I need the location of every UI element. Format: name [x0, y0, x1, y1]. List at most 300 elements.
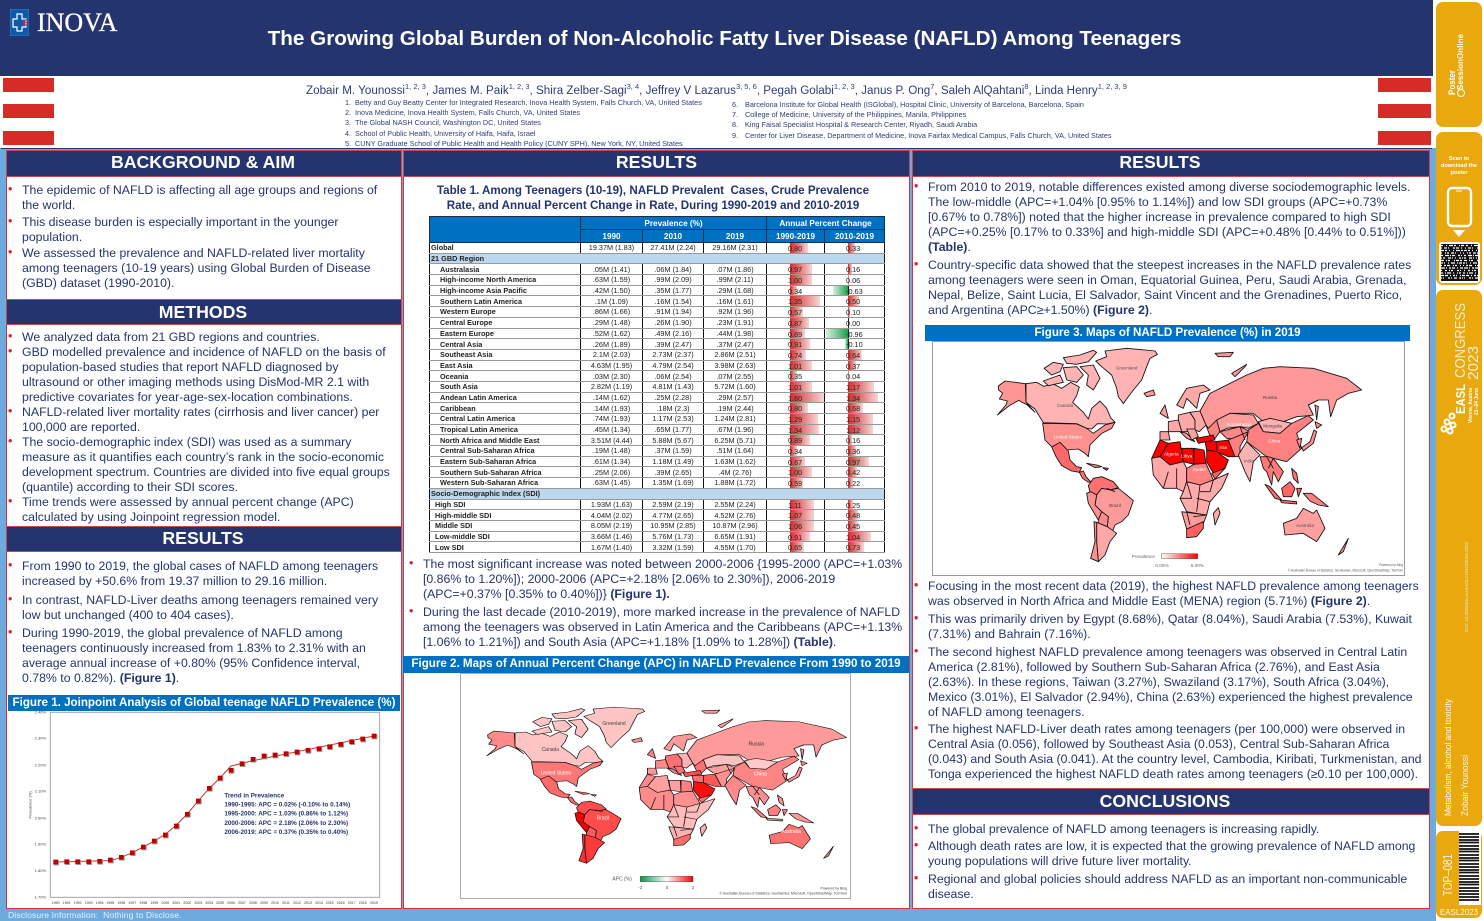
- table 1: .63M (1.45): [593, 478, 630, 487]
- bullet 3: average annual increase of +0.80% (95% Confidence interval,: [22, 656, 360, 670]
- bullet 4: measure as it quantifies each country’s rank in the socio-economic: [22, 450, 384, 464]
- bullet 1: The most significant increase was noted between 2000-2006 {1995-2000 (APC=+1.03%: [423, 557, 902, 571]
- chart: joinpoint line chart: 1.70%: [35, 894, 46, 899]
- chart: joinpoint line chart: 1.90%: [35, 842, 46, 847]
- bullet 2: Country-specific data showed that the steepest increases in the NAFLD prevalence rates: [928, 258, 1411, 272]
- table 1: 1.15: [846, 415, 860, 424]
- legend: prevalence scale: 5.00%: [1191, 563, 1204, 568]
- map: figure 2 APC world map: Canada: [542, 747, 559, 753]
- table 1: 3.32M (1.59): [652, 543, 694, 552]
- map credit: © Australian Bureau of Statistics, GeoNames, Microsoft, OpenStreetMap, TomTom: [1288, 568, 1403, 572]
- affiliations right: 7.: [732, 110, 738, 119]
- panel: EASL congress and session details: [1436, 290, 1482, 826]
- bullet 2: Although death rates are low, it is expected that the growing prevalence of NAFLD among: [928, 839, 1415, 853]
- bullet 5: Time trends were assessed by annual percent change (APC): [22, 495, 354, 509]
- bullet 2: [22, 345, 386, 405]
- map: figure 3 prevalence world map: Australia: [1296, 523, 1314, 528]
- table 1: 5.72M (1.60): [714, 382, 756, 391]
- callout: trend in prevalence: Trend in Prevalence: [224, 792, 285, 799]
- map: figure 2 APC world map: Greenland: [602, 721, 626, 727]
- table 1: 0.74: [788, 351, 802, 360]
- table 1: 8.05M (2.19): [591, 521, 632, 530]
- table 1: .25M (2.06): [593, 468, 630, 477]
- table 1: .06M (2.54): [654, 372, 692, 381]
- chart: joinpoint line chart: 2002: [183, 901, 191, 905]
- bullet 2: predictive covariates for year-age-sex-location combinations.: [22, 390, 353, 404]
- table 1: .51M (1.64): [716, 446, 754, 455]
- table 1: 1.17M (2.53): [652, 414, 694, 423]
- affiliations left: The Global NASH Council, Washington DC, United States: [355, 118, 541, 127]
- table 1: Central Europe: [440, 318, 492, 327]
- bullet 2: During the last decade (2010-2019), more marked increase in the prevalence of NAFLD: [423, 605, 900, 619]
- bullet 1: (APC=+0.37% [0.35% to 0.40%])} (Figure 1).: [423, 587, 670, 601]
- table 1: 1990: [602, 232, 621, 240]
- bullet 3: [22, 405, 379, 435]
- table 1: 0.64: [846, 351, 860, 360]
- bullet 4: Central Asia (0.056), followed by Southeast Asia (0.053), Central Sub-Saharan Africa: [928, 737, 1389, 751]
- bullet 1: Focusing in the most recent data (2019), the highest NAFLD prevalence among teenagers: [928, 579, 1419, 593]
- table 1: .67M (1.96): [716, 425, 754, 434]
- map credit: Powered by Bing: [821, 886, 847, 890]
- table 1: 1.35: [788, 297, 802, 306]
- affiliations right: 9.: [732, 131, 738, 140]
- bullet 2: [423, 605, 902, 650]
- table 1: 0.80: [788, 244, 802, 253]
- table 1: Western Europe: [440, 307, 496, 316]
- legend: APC scale: -2: [638, 885, 643, 890]
- panel: EASL congress and session details: CONGRESS: [1453, 303, 1469, 378]
- bullet 1: [423, 557, 902, 602]
- table 1: .4M (2.76): [718, 468, 752, 477]
- map: figure 3 prevalence world map: United States: [1054, 435, 1083, 440]
- table 1: 0.89: [788, 436, 802, 445]
- table 1: 1.67M (1.40): [591, 543, 632, 552]
- map: figure 3 prevalence world map: Russia: [1263, 395, 1278, 400]
- bullet 3: Regional and global policies should address NAFLD as an important non-communicable: [928, 872, 1407, 886]
- bullet 3: (2.63%). In these regions, Taiwan (3.27%), Swaziland (3.17%), South Africa (3.04%),: [928, 675, 1389, 689]
- title: The Growing Global Burden of Non-Alcoholic Fatty Liver Disease (NAFLD) Among Teenagers: [268, 27, 1181, 50]
- table 1: 2.1M (2.03): [593, 350, 630, 359]
- panel: poster id and barcode: [1436, 831, 1482, 918]
- table 1: 1.34: [788, 426, 802, 435]
- logo: Inova: [10, 8, 118, 37]
- table 1: 4.79M (2.54): [652, 361, 694, 370]
- table 1: .37M (1.59): [654, 446, 692, 455]
- table 1: 1.01: [788, 362, 802, 371]
- table 1: .19M (2.44): [716, 404, 754, 413]
- table 1: 0.45: [846, 522, 860, 531]
- table 1: 0.68: [846, 404, 860, 413]
- table 1: 0.80: [788, 404, 802, 413]
- table 1: .92M (1.96): [716, 307, 754, 316]
- table 1: Central Latin America: [440, 414, 515, 423]
- affiliations left: 1.: [345, 98, 351, 107]
- chart: joinpoint line chart: 2007: [238, 901, 246, 905]
- table 1: 1.63M (1.62): [714, 457, 756, 466]
- table 1: .06M (1.84): [654, 265, 692, 274]
- panel: EASL congress and session details: DOI: 10.3252/pso.eu.EASLCONGRESS.2023: [1464, 542, 1470, 632]
- bullet 1: (APC=+0.25% [0.17% to 0.33%] and high-middle SDI (APC=+0.48% [0.44% to 0.51%])): [928, 225, 1406, 239]
- table 1: High-income Asia Pacific: [440, 286, 527, 295]
- table 1: Middle SDI: [435, 521, 472, 530]
- table 1: .14M (1.93): [593, 404, 630, 413]
- table 1: Tropical Latin America: [440, 425, 518, 434]
- map: figure 3 prevalence world map: Libya: [1181, 454, 1193, 459]
- logo wordmark: INOVA: [37, 8, 117, 37]
- table 1: .16M (1.61): [716, 297, 754, 306]
- disclosure: Disclosure Information: Nothing to Disclose.: [8, 910, 182, 920]
- heading: background and aim: BACKGROUND & AIM: [111, 152, 295, 172]
- table 1: Andean Latin America: [440, 393, 517, 402]
- heading: results column 2: [403, 150, 910, 177]
- table 1: 3.66M (1.46): [591, 532, 632, 541]
- chart: joinpoint line chart: 2001: [172, 901, 180, 905]
- bullet 4: [928, 722, 1422, 782]
- table 1: .29M (1.68): [716, 286, 754, 295]
- table 1: 5.76M (1.73): [652, 532, 694, 541]
- affiliations right: 6.: [732, 100, 738, 109]
- table 1: -0.96: [846, 330, 863, 338]
- table 1: [429, 216, 885, 553]
- map: figure 3 prevalence world map: Mongolia: [1263, 424, 1283, 429]
- table 1: 1.88M (1.72): [714, 478, 756, 487]
- table 1: 1.35M (1.69): [652, 478, 694, 487]
- table 1: .07M (2.55): [716, 372, 754, 381]
- table 1: Eastern Sub-Saharan Africa: [440, 457, 536, 466]
- table 1: Global: [431, 243, 454, 252]
- bullet 2: This was primarily driven by Egypt (8.68%), Qatar (8.04%), Saudi Arabia (7.53%), Kuwait: [928, 612, 1412, 626]
- table 1: 4.63M (1.95): [591, 361, 632, 370]
- bullet 2: [1.06% to 1.21%]) and South Asia (APC=+1.18% [1.09% to 1.28%]) (Table).: [423, 635, 836, 649]
- map: figure 3 prevalence world map: Brazil: [1109, 503, 1121, 508]
- bullet 1: [22, 183, 377, 213]
- bullet 2: population-based studies that report NAFLD diagnosed by: [22, 360, 339, 374]
- bullet 1: (Table).: [928, 240, 971, 254]
- table 1: 1.34: [846, 394, 860, 403]
- table 1: 0.57: [788, 308, 802, 317]
- table 1: 0.10: [846, 308, 860, 317]
- map: figure 3 prevalence world map: China: [1268, 439, 1281, 444]
- table 1: .99M (2.11): [717, 275, 753, 284]
- table 1: 1.93M (1.63): [591, 500, 632, 509]
- bullet 4: (0.043) and South Asia (0.041). At the country level, Cambodia, Kiribati, Turkmenistan, and: [928, 752, 1422, 766]
- chart: joinpoint line chart: 2003: [194, 901, 202, 905]
- bullet 1: The low-middle (APC=+1.04% [0.95% to 1.14%]) and low SDI groups (APC=+0.73%: [928, 195, 1387, 209]
- heading: conclusions: CONCLUSIONS: [1100, 791, 1230, 811]
- bullet 1: From 2010 to 2019, notable differences existed among diverse sociodemographic levels.: [928, 180, 1410, 194]
- chart: joinpoint line chart: 1996: [117, 901, 125, 905]
- table 1: .29M (1.48): [593, 318, 630, 327]
- bullet 4: development spectrum. Countries are divided into five equal groups: [22, 465, 390, 479]
- panel: scan to download: [1436, 132, 1482, 285]
- chart: joinpoint line chart: 2014: [315, 901, 323, 905]
- bullet 4: The highest NAFLD-Liver death rates among teenagers (per 100,000) were observed in: [928, 722, 1405, 736]
- legend: prevalence scale: [1132, 554, 1204, 568]
- panel: column 2: [403, 150, 910, 909]
- heading: results column 1: RESULTS: [162, 528, 244, 548]
- bullet 3: [928, 645, 1413, 720]
- chart: joinpoint line chart: 1990: [52, 901, 60, 905]
- heading: results column 3: [912, 150, 1430, 177]
- panel: poster id and barcode: EASL2023: [1440, 908, 1479, 917]
- table 1: 0.33: [846, 244, 860, 253]
- table 1: 6.65M (1.91): [714, 532, 756, 541]
- table 1: 0.36: [846, 447, 860, 456]
- affiliations left: Betty and Guy Beatty Center for Integrated Research, Inova Health System, Falls Church, VA, United States: [355, 98, 702, 107]
- chart: joinpoint line chart: 2.20%: [35, 762, 46, 767]
- bullet 3: [22, 626, 366, 686]
- table 1: 0.48: [846, 511, 860, 520]
- table 1: 1.06: [788, 522, 802, 531]
- chart: joinpoint line chart: 2013: [304, 901, 312, 905]
- affiliations left: 2.: [345, 108, 351, 117]
- table 1: 0.97: [846, 458, 860, 467]
- bullet 1: The global prevalence of NAFLD among teenagers is increasing rapidly.: [928, 822, 1319, 836]
- affiliations right: King Faisal Specialist Hospital & Research Center, Riyadh, Saudi Arabia: [745, 120, 977, 129]
- callout: trend in prevalence: 1990-1995: APC = 0.02% (-0.10% to 0.14%): [224, 802, 350, 809]
- table 1: 19.37M (1.83): [589, 243, 634, 252]
- affiliations right: Center for Liver Disease, Department of Medicine, Inova Fairfax Medical Campus, Falls Church, VA, United States: [745, 131, 1112, 140]
- panel: scan to download: Scan to: [1449, 156, 1470, 162]
- chart: joinpoint line chart: 2.10%: [35, 789, 46, 794]
- red placeholder bars right: [1378, 78, 1431, 145]
- legend: prevalence scale: 0.00%: [1155, 563, 1169, 568]
- affiliations left: 4.: [345, 129, 351, 138]
- table 1: .35M (1.77): [654, 286, 692, 295]
- bullet 3: teenagers continuously increased from 1.83% to 2.31% with an: [22, 641, 366, 655]
- affiliations left: CUNY Graduate School of Public Health and Health Policy (CUNY SPH), New York, NY, United States: [355, 139, 683, 148]
- table 1: Low SDI: [435, 543, 464, 552]
- table 1: .26M (1.89): [593, 340, 630, 349]
- table 1: .25M (2.28): [654, 393, 692, 402]
- map: figure 3 prevalence world map: Sudan: [1193, 467, 1206, 472]
- table 1: .52M (1.62): [593, 329, 630, 338]
- callout: trend in prevalence: 1995-2000: APC = 1.03% (0.86% to 1.12%): [224, 811, 348, 818]
- panel: poster id and barcode: TOP–081: [1440, 854, 1455, 896]
- map: figure 2 APC world map: [460, 673, 851, 899]
- table title: Rate, and Annual Percent Change in Rate, During 1990-2019 and 2010-2019: [447, 198, 859, 212]
- table 1: Western Sub-Saharan Africa: [440, 478, 538, 487]
- table 1: .37M (2.47): [716, 340, 754, 349]
- table 1: 0.91: [788, 340, 802, 349]
- text: column 3 lower bullets: [914, 579, 1422, 781]
- table 1: 1.17: [846, 383, 860, 392]
- bullet 2: [22, 215, 338, 245]
- chart: joinpoint line chart: 2019: [370, 901, 378, 905]
- heading: results column 3: RESULTS: [1119, 152, 1201, 172]
- affiliations right: [732, 100, 1112, 140]
- chart: joinpoint line chart: 2012: [293, 901, 301, 905]
- chart: joinpoint line chart: 1998: [139, 901, 147, 905]
- table 1: 0.34: [788, 447, 802, 456]
- table 1: .91M (1.94): [654, 307, 692, 316]
- table 1: 2.86M (2.51): [714, 350, 756, 359]
- table 1: 2.59M (2.19): [652, 500, 694, 509]
- affiliations right: 8.: [732, 120, 738, 129]
- chart: joinpoint line chart: 2010: [271, 901, 279, 905]
- affiliations left: 5.: [345, 139, 351, 148]
- table 1: .29M (2.57): [716, 393, 754, 402]
- chart: joinpoint line chart: 2006: [227, 901, 235, 905]
- table 1: 27.41M (2.24): [650, 243, 696, 252]
- bullet 2: [928, 612, 1412, 642]
- table title: Table 1. Among Teenagers (10-19), NAFLD Prevalent Cases, Crude Prevalence: [437, 184, 869, 197]
- chart: joinpoint line chart: Prevalence (%): [28, 791, 33, 819]
- sidebar: EASL poster strip: [1436, 2, 1482, 918]
- table 1: 0.00: [846, 319, 860, 328]
- table 1: Australasia: [440, 265, 479, 274]
- table 1: .1M (1.09): [595, 297, 628, 306]
- table 1: 4.77M (2.65): [652, 511, 694, 520]
- chart: joinpoint line chart: 2009: [260, 901, 268, 905]
- bullet 2: ultrasound or other imaging methods using DisMod-MR 2.1 with: [22, 375, 369, 389]
- table 1: South Asia: [440, 382, 478, 391]
- table 1: 1.07: [788, 511, 802, 520]
- map: figure 2 APC world map: China: [754, 771, 767, 777]
- table 1: Low-middle SDI: [435, 532, 490, 541]
- table 1: 0.91: [788, 533, 802, 542]
- callout: trend in prevalence: [224, 792, 350, 836]
- affiliations left: [345, 98, 702, 148]
- table 1: -0.10: [846, 340, 863, 349]
- table 1: 1.00: [788, 276, 802, 285]
- chart: joinpoint line chart: 1994: [96, 901, 104, 905]
- affiliations left: School of Public Health, University of Haifa, Haifa, Israel: [355, 129, 536, 138]
- table 1: .63M (1.59): [593, 275, 630, 284]
- map: figure 3 prevalence world map: Greenland: [1116, 366, 1138, 371]
- table 1: 0.37: [846, 362, 860, 371]
- panel: poster session online: [1436, 2, 1482, 127]
- panel: EASL congress and session details: 2023: [1465, 346, 1482, 380]
- table 1: 29.16M (2.31): [712, 243, 758, 252]
- red placeholder bars left: [3, 78, 54, 145]
- table 1: 1990-2019: [776, 232, 815, 240]
- authors: Zobair M. Younossi1, 2, 3, James M. Paik1, 2, 3, Shira Zelber-Sagi3, 4, Jeffrey V Lazarus3, 5, 6, Pegah Golabi1, 2, 3, Janus P. Ong7, Saleh AlQahtani8, Linda Henry1, 2, 3, 9: [306, 82, 1127, 97]
- bullet 4: [22, 435, 390, 495]
- bullet 3: We assessed the prevalence and NAFLD-related liver mortality: [22, 246, 365, 260]
- chart: joinpoint line chart: 1.80%: [35, 868, 46, 873]
- bullet 1: was observed in North Africa and Middle East (MENA) region (5.71%) (Figure 2).: [928, 594, 1370, 608]
- table 1: .03M (2.30): [593, 372, 630, 381]
- chart: joinpoint line chart: 2018: [359, 901, 367, 905]
- table 1: 0.73: [846, 543, 860, 552]
- map: figure 2 APC world map: Russia: [749, 741, 764, 747]
- bullet 2: (7.31%) and Bahrain (7.16%).: [928, 627, 1091, 641]
- legend: APC scale: 2: [692, 885, 695, 890]
- panel: EASL congress and session details: Metabolism, alcohol and toxicity: [1443, 699, 1454, 816]
- bullet 1: From 1990 to 2019, the global cases of NAFLD among teenagers: [22, 559, 378, 573]
- table 1: .45M (1.34): [593, 425, 630, 434]
- heading: results column 1: [6, 526, 402, 552]
- heading: background and aim: [6, 150, 402, 177]
- table 1: Southern Sub-Saharan Africa: [440, 468, 542, 477]
- callout: trend in prevalence: 2000-2006: APC = 2.18% (2.06% to 2.30%): [224, 820, 348, 827]
- bullet 3: disease.: [928, 887, 974, 901]
- heading: methods: METHODS: [159, 302, 247, 322]
- table 1: 0.65: [788, 543, 802, 552]
- chart: joinpoint line chart: 1997: [128, 901, 136, 905]
- bullet 4: Tonga experienced the highest NAFLD death rates among teenagers (≥0.10 per 100,000).: [928, 767, 1418, 781]
- table 1: 2019: [726, 232, 744, 240]
- table 1: 0.22: [846, 479, 860, 488]
- table 1: Oceania: [440, 372, 468, 381]
- legend: APC scale: 0: [666, 885, 669, 890]
- table 1: High SDI: [435, 500, 465, 509]
- table 1: Southeast Asia: [440, 350, 492, 359]
- table 1: .05M (1.41): [593, 265, 630, 274]
- bullet 3: [928, 872, 1407, 902]
- table 1: 1.04: [846, 533, 860, 542]
- chart: joinpoint line chart: 1999: [150, 901, 158, 905]
- bullet 3: During 1990-2019, the global prevalence of NAFLD among: [22, 626, 343, 640]
- bullet 4: The socio-demographic index (SDI) was used as a summary: [22, 435, 351, 449]
- text: column 2 bullets: [410, 557, 902, 649]
- bullet 3: among teenagers (10-19 years) using Global Burden of Disease: [22, 261, 371, 275]
- table 1: .44M (1.98): [716, 329, 754, 338]
- table 1: .99M (2.09): [654, 275, 692, 284]
- table 1: 0.06: [846, 276, 860, 285]
- table 1: 0.25: [846, 500, 860, 510]
- table 1: 21 GBD Region: [431, 254, 484, 263]
- table 1: High-income North America: [440, 275, 536, 284]
- chart: joinpoint line chart: 2.00%: [35, 815, 46, 820]
- panel: scan to download: download the: [1441, 163, 1477, 169]
- map: figure 2 APC world map: Brazil: [597, 816, 609, 822]
- table 1: 0.34: [788, 287, 802, 296]
- chart: joinpoint line chart: 1991: [63, 901, 71, 905]
- table 1: 4.81M (1.43): [652, 382, 694, 391]
- table 1: North Africa and Middle East: [440, 436, 539, 445]
- map credit: Powered by Bing: [1379, 563, 1403, 567]
- table 1: East Asia: [440, 361, 473, 370]
- chart: joinpoint line chart: 2016: [337, 901, 345, 905]
- text: results bullets: [8, 559, 378, 685]
- table 1: 3.98M (2.63): [714, 361, 756, 370]
- table 1: 3.51M (4.44): [591, 436, 632, 445]
- bullet 1: We analyzed data from 21 GBD regions and countries.: [22, 330, 320, 344]
- legend: APC scale: [612, 876, 695, 890]
- table 1: .14M (1.62): [593, 393, 630, 402]
- chart: joinpoint line chart: [28, 711, 380, 905]
- bullet 2: [928, 258, 1411, 318]
- chart: joinpoint line chart: 2017: [348, 901, 356, 905]
- bullet 2: GBD modelled prevalence and incidence of NAFLD on the basis of: [22, 345, 386, 359]
- legend: APC scale: APC (%): [612, 876, 632, 882]
- heading: conclusions: [912, 788, 1430, 815]
- table 1: .07M (1.86): [716, 265, 754, 274]
- panel: column 1: [6, 150, 402, 909]
- figure 3 heading: [925, 325, 1410, 341]
- panel: scan to download: poster: [1450, 170, 1468, 176]
- text: column 3 upper bullets: [914, 180, 1411, 317]
- table 1: .61M (1.34): [593, 457, 630, 466]
- figure 3 heading: Figure 3. Maps of NAFLD Prevalence (%) in 2019: [1034, 326, 1301, 339]
- bullet 2: This disease burden is especially important in the younger: [22, 215, 338, 229]
- panel: EASL congress and session details: Zobair Younossi: [1460, 755, 1471, 816]
- table 1: 0.16: [846, 436, 860, 445]
- table 1: 6.25M (5.71): [714, 436, 756, 445]
- bullet 1: The epidemic of NAFLD is affecting all age groups and regions of: [22, 183, 377, 197]
- affiliations left: Inova Medicine, Inova Health System, Falls Church, VA, United States: [355, 108, 580, 117]
- table 1: 2.73M (2.37): [652, 350, 694, 359]
- author band: [1, 76, 1432, 149]
- heading: results column 2: RESULTS: [616, 152, 697, 172]
- chart: joinpoint line chart: 2.30%: [35, 736, 46, 741]
- chart: joinpoint line chart: 1993: [85, 901, 93, 905]
- bullet 3: 100,000 are reported.: [22, 420, 140, 434]
- icon: EASL flowers: [1442, 414, 1456, 434]
- bullet 4: (quantile) according to their SDI scores.: [22, 480, 238, 494]
